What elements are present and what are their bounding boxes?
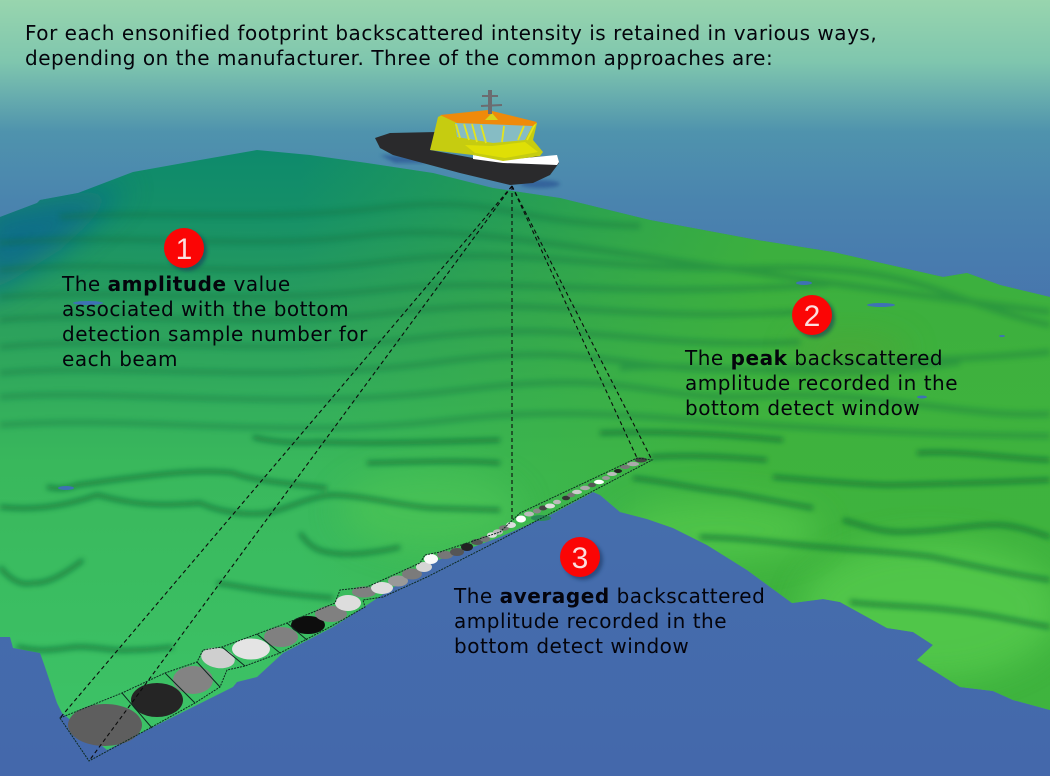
footprints [68, 458, 647, 746]
text: approach 3 averaged: The averaged backscattered [454, 584, 765, 608]
icon: survey vessel [375, 90, 560, 188]
swath outline [60, 458, 652, 761]
text: approach 3 averaged [454, 584, 765, 658]
small islet [531, 515, 551, 521]
title: For each ensonified footprint backscattered intensity is retained in various ways, [25, 21, 877, 45]
text: approach 1 amplitude: The amplitude value [62, 272, 291, 296]
beam lines from vessel to swath [60, 186, 652, 761]
marker 1: 1 [176, 233, 192, 266]
text: approach 1 amplitude: each beam [62, 347, 178, 371]
title [25, 21, 877, 70]
text: approach 1 amplitude: detection sample number for [62, 322, 368, 346]
swath footprint strip [60, 458, 652, 761]
title: depending on the manufacturer. Three of the common approaches are: [25, 46, 773, 70]
text: approach 1 amplitude: associated with the bottom [62, 297, 349, 321]
small water pockets [58, 281, 1005, 490]
marker 3 [560, 537, 603, 580]
text: approach 2 peak: amplitude recorded in the [685, 371, 958, 395]
text: approach 1 amplitude [62, 272, 368, 371]
marker 3: 3 [572, 542, 588, 575]
text: approach 2 peak [684, 346, 958, 420]
text: approach 3 averaged: bottom detect window [454, 634, 689, 658]
text: approach 2 peak: bottom detect window [685, 396, 920, 420]
marker 2 [792, 295, 835, 338]
lower ripples [0, 432, 1050, 650]
marker 1 [164, 228, 207, 271]
text: approach 2 peak: The peak backscattered [685, 346, 943, 370]
text: approach 3 averaged: amplitude recorded in the [454, 609, 727, 633]
marker 2: 2 [804, 300, 820, 333]
upper faint ripples [0, 204, 1050, 436]
